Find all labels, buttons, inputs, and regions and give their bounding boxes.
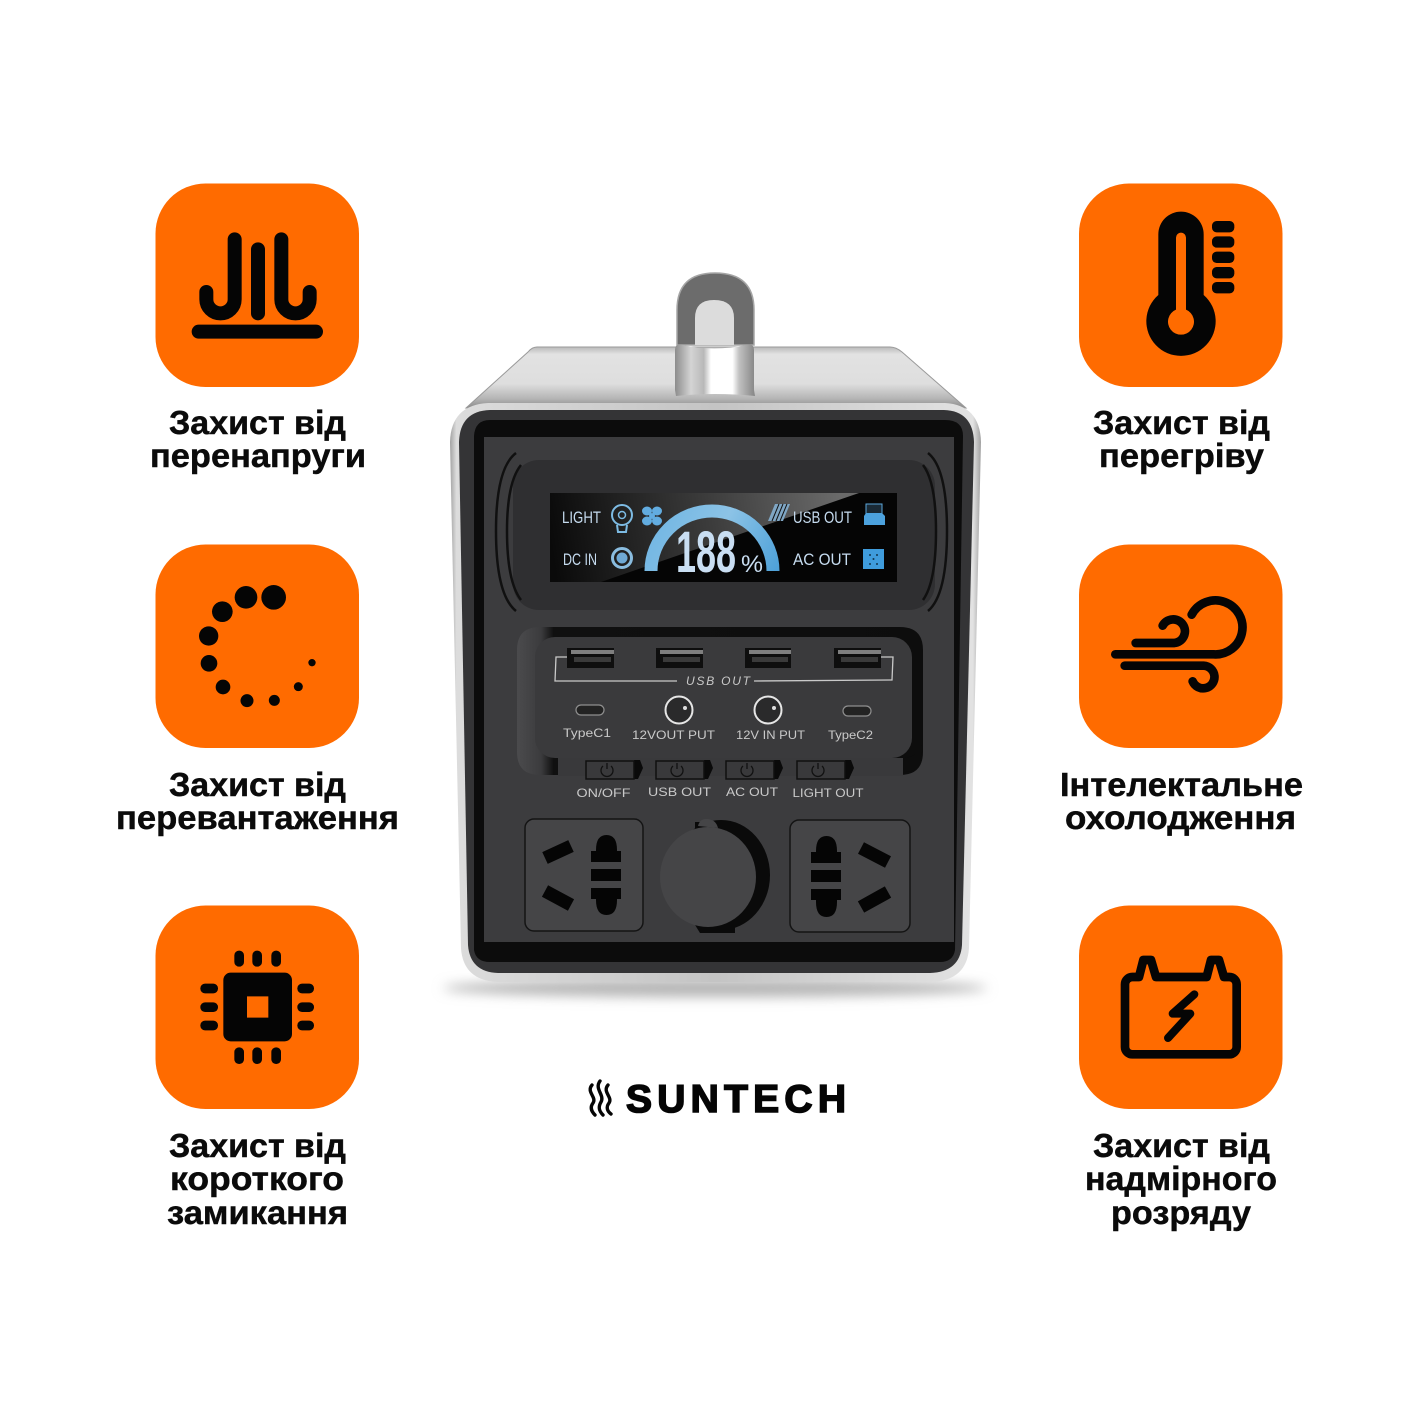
icon: microchip [200,951,314,1064]
LCD right labels [793,508,852,569]
battery percent: 188 [676,520,736,585]
port labels: 12V IN PUT [736,728,806,742]
power buttons [586,760,854,779]
LCD right icons [768,504,885,569]
USB ports [567,648,881,668]
input and output ports [576,696,871,724]
LCD right labels: AC OUT [793,550,851,569]
display bezel [513,460,935,610]
text: short circuit protection: Захист від [169,1127,346,1164]
button labels: LIGHT OUT [792,786,864,800]
button labels: USB OUT [648,785,712,799]
button labels: ON/OFF [576,786,630,800]
USB OUT bracket and label [555,657,893,688]
panel: surge protection icon [156,184,359,387]
button labels [576,785,864,800]
text: overheat protection: Захист від [1093,404,1270,441]
front face [484,437,954,942]
LCD left labels [562,508,601,569]
icon: loading dots [199,585,316,707]
text: overload protection: перевантаження [116,799,399,836]
panel: intelligent cooling icon [1079,544,1282,748]
icon: thermometer [1146,212,1234,356]
USB recess [517,627,923,776]
LCD left labels: DC IN [563,550,597,569]
text: surge protection: Захист від [169,404,346,441]
product: portable power station [443,273,987,997]
left AC outlet [525,819,643,931]
top cover [466,347,966,408]
icon: wind [1115,600,1242,688]
LCD right labels: USB OUT [793,508,852,527]
LCD screen [550,493,897,585]
port labels: TypeC1 [563,726,611,740]
text: short circuit protection: замикання [167,1194,348,1231]
battery gauge arc [651,511,773,571]
text: overheat protection [1093,404,1270,474]
panel: overload protection icon [156,544,359,748]
icon: surge waves [199,239,316,332]
port labels: 12VOUT PUT [632,728,716,742]
handle [677,273,754,345]
text: over-discharge protection: розряду [1111,1194,1252,1231]
logo: SUNTECH: SUNTECH [626,1078,846,1121]
text: overload protection [116,766,399,836]
icon: battery [1125,960,1237,1054]
logo waves [590,1081,611,1115]
panel: overheat protection icon [1079,184,1282,387]
text: over-discharge protection: Захист від [1093,1127,1270,1164]
handle base [675,345,755,396]
LCD left labels: LIGHT [562,508,601,527]
silver frame [450,403,981,982]
text: intelligent cooling: охолодження [1065,799,1296,836]
text: overload protection: Захист від [169,766,346,803]
right AC outlet [790,820,910,932]
dark bezel [459,410,974,973]
text: intelligent cooling [1060,766,1303,836]
LCD left icons [612,505,662,568]
text: surge protection [150,404,366,474]
text: short circuit protection [167,1127,348,1231]
vents [496,453,947,611]
text: over-discharge protection [1085,1127,1277,1231]
text: over-discharge protection: надмірного [1085,1160,1277,1197]
socket cap [660,819,770,933]
button labels: AC OUT [726,785,779,799]
black band [474,420,963,962]
port labels [563,726,873,742]
text: overheat protection: перегріву [1099,437,1265,474]
port labels: TypeC2 [828,728,873,742]
text: short circuit protection: короткого [170,1160,344,1197]
text: surge protection: перенапруги [150,437,366,474]
USB OUT bracket and label: USB OUT [686,674,752,688]
text: intelligent cooling: Інтелектальне [1060,766,1303,803]
panel: short circuit protection icon [156,906,359,1109]
panel: over-discharge protection icon [1079,906,1282,1109]
battery percent: % [741,551,763,578]
